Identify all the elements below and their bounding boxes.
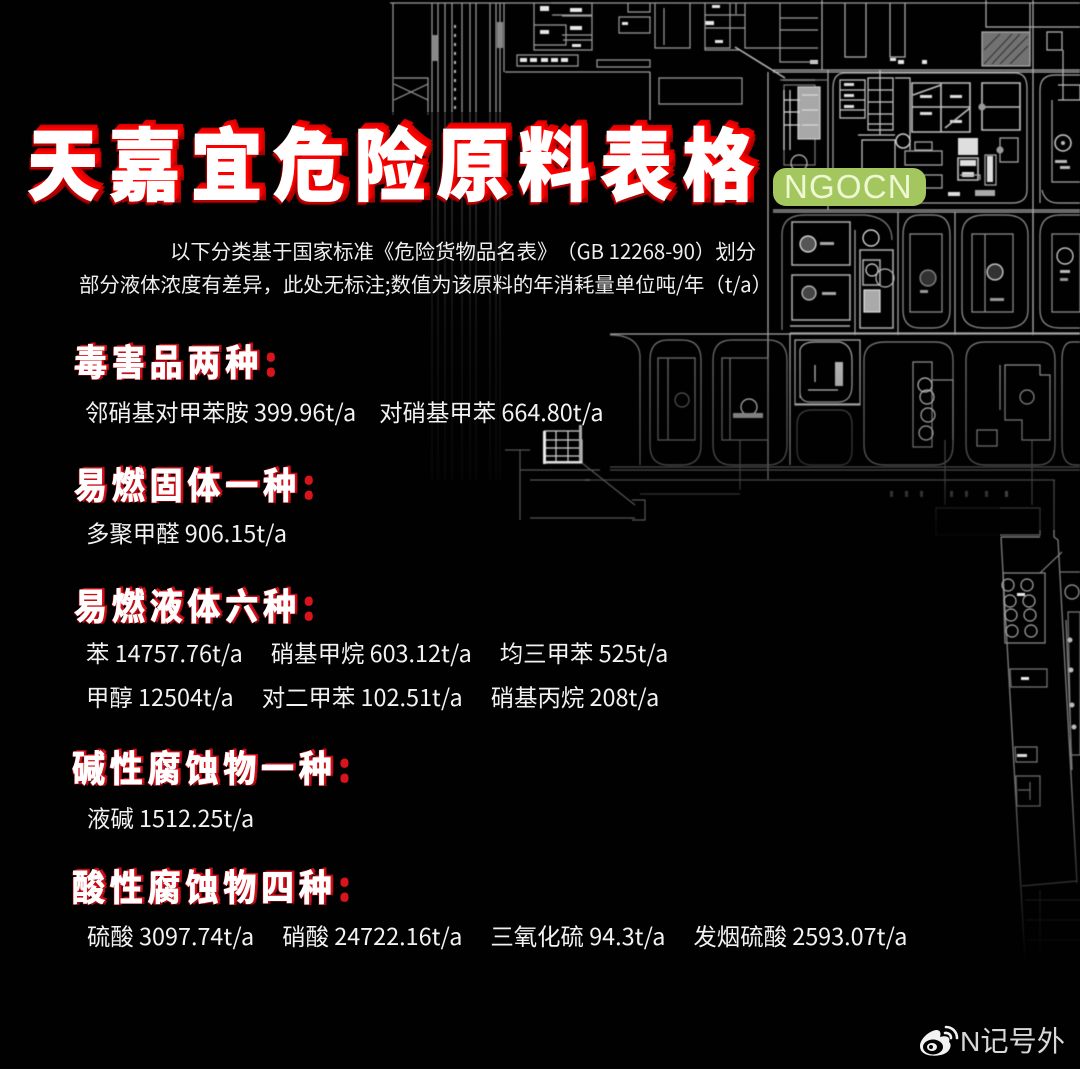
section: flammable liquid — [74, 574, 668, 713]
row one block — [833, 73, 1027, 203]
hatch block — [982, 32, 1030, 66]
heading: flammable solid: 易燃固体一种: — [74, 453, 315, 511]
lower right site edge — [1001, 480, 1077, 960]
heading: flammable liquid: 易燃液体六种: — [74, 574, 315, 632]
items: alkaline corrosive: 液碱 1512.25t/a — [87, 800, 254, 834]
section: toxic substances — [74, 330, 604, 428]
heading: toxic: 毒害品两种: — [74, 330, 277, 388]
items: flammable liquid row one: 苯 14757.76t/a 硝基甲烷 603.12t/a 均三甲苯 525t/a — [86, 635, 668, 669]
items: acidic corrosive: 硫酸 3097.74t/a 硝酸 24722.16t/a 三氧化硫 94.3t/a 发烟硫酸 2593.07t/a — [87, 918, 907, 952]
section: flammable solid — [74, 453, 315, 549]
row two blocks — [782, 215, 892, 330]
intro text: 以下分类基于国家标准《危险货物品名表》 （GB 12268-90）划分 — [170, 235, 756, 265]
watermark text: N记号外 — [960, 1025, 1065, 1057]
icon: weibo logo — [920, 1026, 958, 1056]
road and details below third row — [585, 467, 1080, 494]
intro text — [79, 235, 772, 298]
heading: alkaline corrosive: 碱性腐蚀物一种: — [72, 736, 350, 794]
grid block at lower left — [505, 425, 645, 520]
title: 天嘉宜危险原料表格 — [27, 102, 764, 217]
section: alkaline corrosive — [72, 736, 350, 834]
items: flammable liquid row two: 甲醇 12504t/a 对二甲苯 102.51t/a 硝基丙烷 208t/a — [86, 679, 659, 713]
blueprint fades — [0, 0, 388, 1069]
intro text: 部分液体浓度有差异，此处无标注;数值为该原料的年消耗量单位吨/年（t/a） — [79, 268, 772, 298]
logo: NGOCN badge: NGOCN — [784, 168, 913, 205]
top band and pipe rack — [390, 3, 1080, 480]
central road grid — [650, 0, 1080, 480]
row three blocks — [610, 335, 787, 465]
section: acidic corrosive — [72, 855, 907, 952]
heading: acidic corrosive: 酸性腐蚀物四种: — [72, 855, 350, 913]
road between rows — [773, 210, 1080, 335]
items: toxic: 邻硝基对甲苯胺 399.96t/a 对硝基甲苯 664.80t/a — [85, 394, 604, 428]
horizontal road above third row — [610, 333, 1080, 334]
items: flammable solid: 多聚甲醛 906.15t/a — [86, 515, 287, 549]
